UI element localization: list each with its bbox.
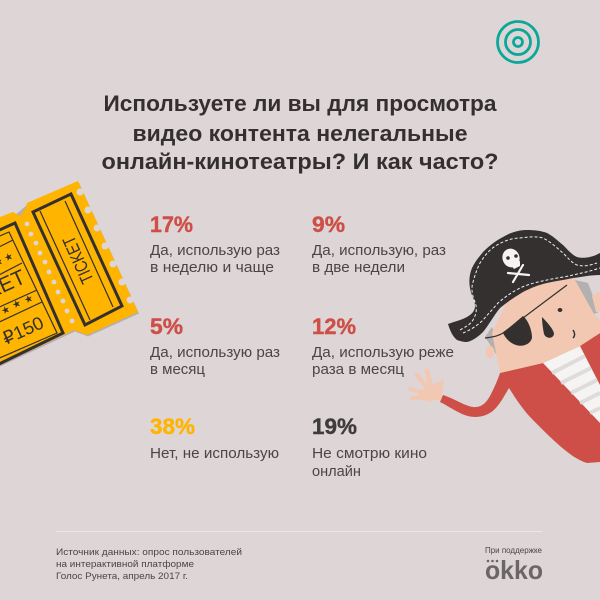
ticket main labels: ★ [23,293,35,307]
pirate eyepatch [503,316,532,346]
footer divider [56,531,542,532]
pirate body and arm [440,333,600,463]
stat: 19% [312,414,427,480]
stat: 5%: Да, использую раз [150,345,280,361]
stat: 5% [150,314,280,378]
ticket main labels [0,251,47,349]
ticket body [0,181,138,365]
ticket shadow [0,183,139,366]
stat: 38%: Нет, не использую [150,446,279,462]
stat: 12%: раза в месяц [312,362,404,378]
pirate hand [410,371,443,401]
title: Используете ли вы для просмотра [104,91,497,116]
pirate hat [448,230,600,342]
stat: 9%: Да, использую, раз [312,243,446,259]
stat: 9% [312,212,446,276]
ticket main labels: ★ [11,298,23,312]
source note: на интерактивной платформе [56,559,194,570]
pirate left hair [485,327,503,360]
title: онлайн-кинотеатры? И как часто? [102,149,498,174]
stat: 17%: Да, использую раз [150,243,280,259]
stat: 19%: Не смотрю кино [312,446,427,462]
ticket perforation [25,222,74,323]
ticket stub label: TICKET [59,233,98,287]
illustration: tickets [0,181,139,366]
pirate right hair strip [575,280,599,314]
source note: Голос Рунета, апрель 2017 г. [56,571,188,582]
illustration: pirate [410,230,600,463]
stat: 17%: 17% [150,212,193,237]
stat: 19%: онлайн [312,464,361,480]
stat: 17% [150,212,280,276]
pirate nose [542,317,554,338]
ticket scallops [76,188,134,304]
ticket stub frame [33,194,122,325]
ticket main labels: ₽150 [0,313,47,349]
sponsor logo: При поддержке [485,545,542,555]
pirate skull and bones [500,246,529,282]
icon: target logo [498,22,538,62]
pirate right ear [592,292,600,312]
ticket main labels: ★ [3,251,15,265]
stat: 12%: Да, использую реже [312,345,454,361]
sponsor logo: okko [485,555,543,585]
pirate face [492,278,600,373]
stat: 12%: 12% [312,314,356,339]
pirate left ear [486,346,494,358]
stat: 19%: 19% [312,414,357,439]
stat: 9%: 9% [312,212,345,237]
source note [56,547,242,582]
pirate strap [485,285,567,338]
stat: 12% [312,314,454,378]
stat: 5%: в месяц [150,362,205,378]
stat: 38% [150,414,279,462]
source note: Источник данных: опрос пользователей [56,547,242,558]
ticket main frame [0,223,63,366]
stat: 5%: 5% [150,314,183,339]
pirate striped shirt [543,346,600,423]
title [102,91,498,174]
stat: 17%: в неделю и чаще [150,260,274,276]
pirate eye [558,308,562,312]
title: видео контента нелегальные [132,121,468,146]
stat: 9%: в две недели [312,260,405,276]
stat: 38%: 38% [150,414,195,439]
pirate mouth [573,330,574,338]
pirate hat stitching [460,237,600,333]
